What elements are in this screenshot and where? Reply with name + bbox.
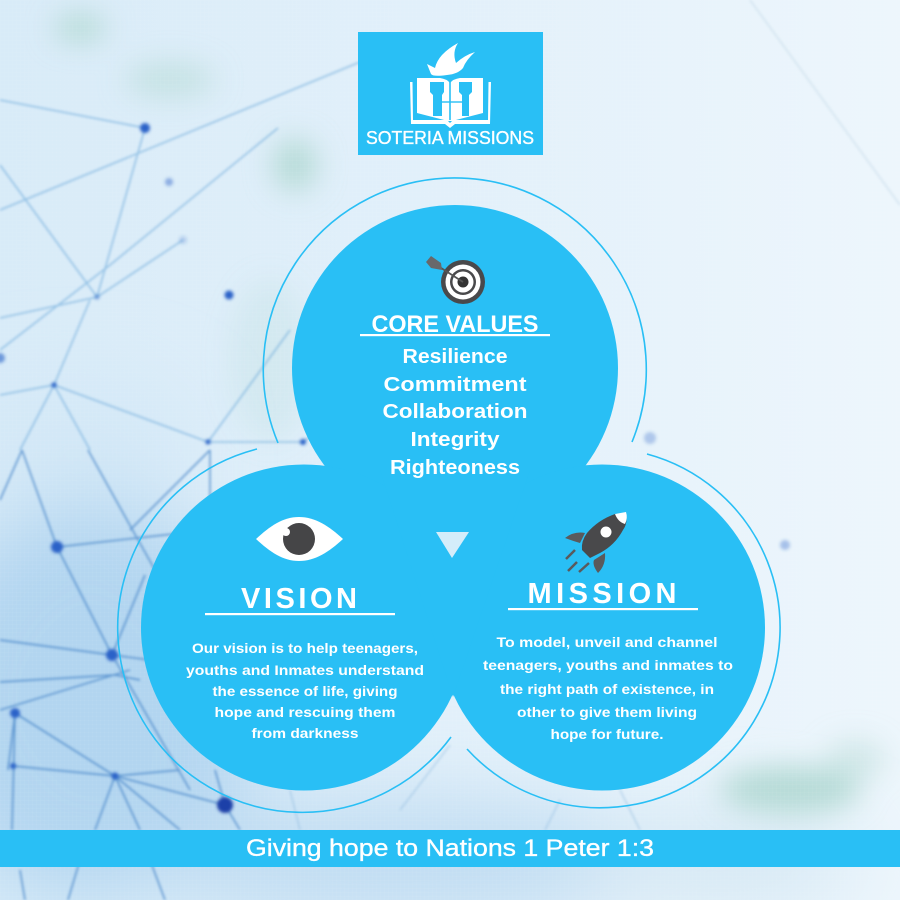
vision text: the essence of life, giving bbox=[212, 683, 398, 699]
core values list: Collaboration bbox=[382, 400, 528, 423]
icon: rocket bbox=[565, 512, 627, 573]
footer banner: Giving hope to Nations 1 Peter 1:3 bbox=[246, 835, 654, 862]
footer banner bbox=[0, 830, 900, 867]
core values list: Integrity bbox=[410, 428, 500, 451]
outer ring arcs bbox=[118, 178, 780, 812]
mission text: the right path of existence, in bbox=[500, 681, 714, 697]
core values list bbox=[382, 345, 528, 479]
icon: dove bbox=[427, 43, 475, 76]
icon: target bbox=[426, 256, 485, 304]
mission text: hope for future. bbox=[550, 726, 664, 742]
icon: eye bbox=[256, 517, 343, 561]
vision text: youths and Inmates understand bbox=[186, 662, 424, 678]
vision text: Our vision is to help teenagers, bbox=[192, 640, 418, 656]
mission text bbox=[483, 634, 733, 742]
center triangle arrow bbox=[436, 532, 469, 558]
vision heading: VISION bbox=[241, 583, 357, 615]
panel: core values bbox=[292, 205, 618, 531]
panel: mission bbox=[439, 464, 765, 790]
vision text bbox=[186, 640, 424, 741]
logo name: SOTERIA MISSIONS bbox=[366, 128, 534, 148]
vision text: from darkness bbox=[252, 725, 359, 741]
core values list: Resilience bbox=[402, 345, 508, 368]
circle panels bbox=[141, 205, 765, 790]
core values list: Righteoness bbox=[390, 456, 520, 479]
mission heading: MISSION bbox=[528, 578, 676, 610]
mission text: teenagers, youths and inmates to bbox=[483, 657, 733, 673]
logo bbox=[358, 32, 543, 155]
icon: open book with fists bbox=[410, 78, 491, 128]
mission text: To model, unveil and channel bbox=[496, 634, 718, 650]
core values heading: CORE VALUES bbox=[372, 311, 538, 338]
core values list: Commitment bbox=[384, 373, 527, 396]
mission text: other to give them living bbox=[517, 704, 697, 720]
vision text: hope and rescuing them bbox=[214, 704, 396, 720]
panel: vision bbox=[141, 464, 467, 790]
